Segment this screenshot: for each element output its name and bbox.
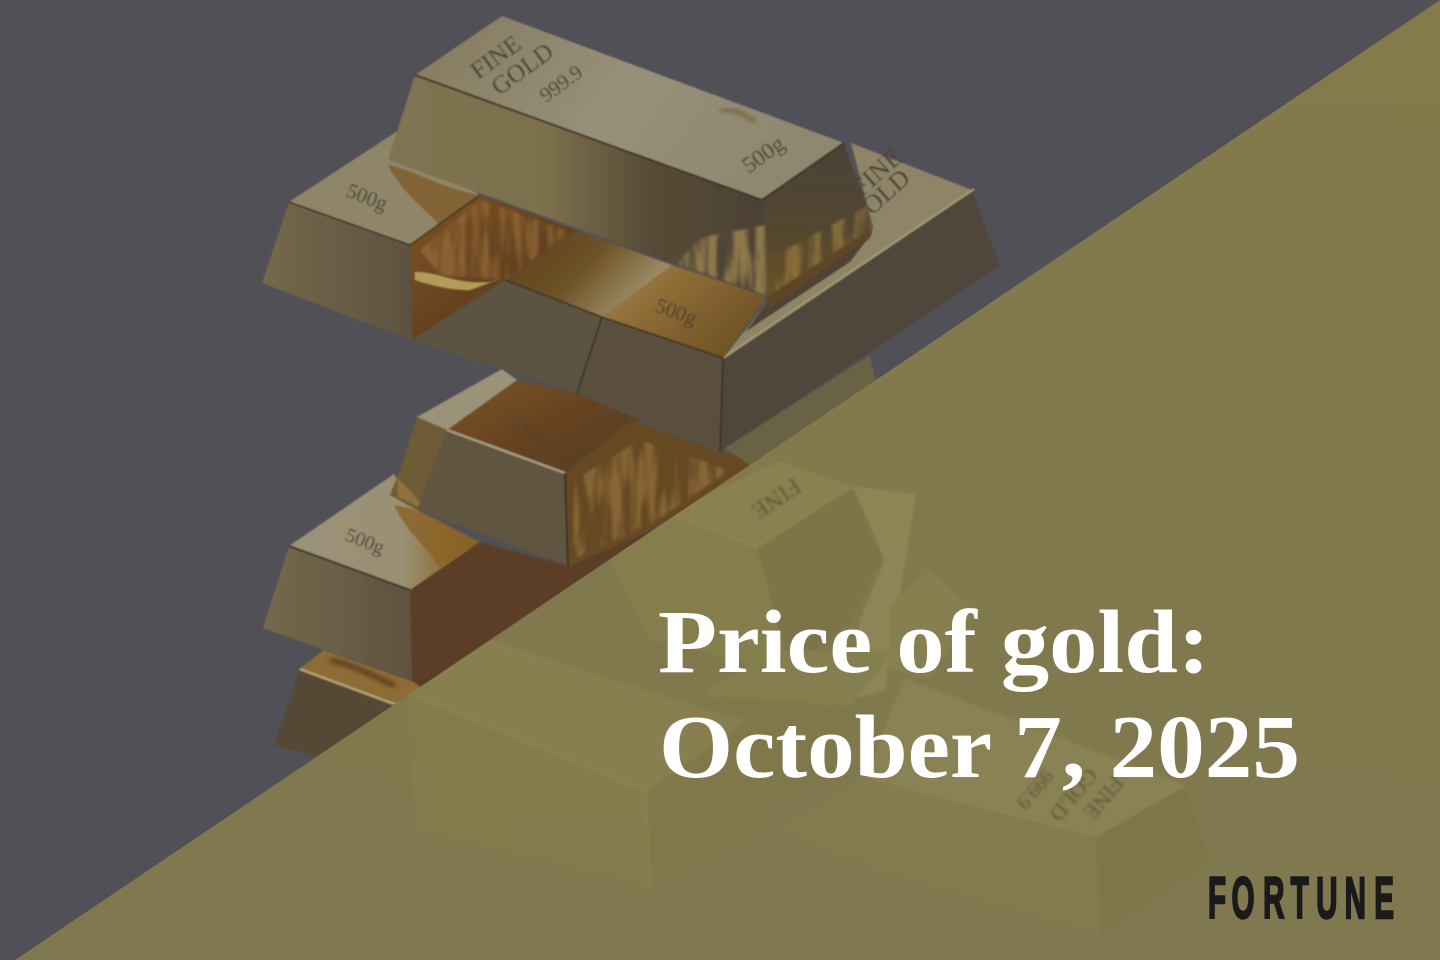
ghost bar: centre bar: [786, 652, 889, 696]
engraved text: FINE: [1078, 771, 1129, 825]
engraved weight: 500g: [342, 524, 387, 559]
feathered reflections on side: [676, 225, 767, 296]
engraved text: 999.9: [1012, 765, 1057, 813]
engraved weight: 500g: [652, 293, 700, 330]
photo: stack of gold bars: [262, 16, 1000, 780]
engraved text: FINE: [846, 142, 908, 202]
title: [658, 593, 1300, 797]
light streak on orange face: [415, 272, 502, 290]
engraved weight: 500g: [503, 409, 548, 446]
gold bar: top FINE GOLD 999.9: [388, 16, 873, 308]
engraved text: FINE: [747, 472, 805, 523]
gold bar: lower back bar: [274, 650, 440, 780]
gold bar: right base bar: [720, 142, 1000, 472]
engraved text: 500g: [737, 130, 790, 178]
feathered reflections on end: [770, 205, 873, 295]
gold bar: lower 500g bar: [263, 474, 660, 720]
title line 2: October 7, 2025: [659, 698, 1300, 797]
ghost bar: upper FINE bar: [610, 461, 916, 700]
engraved weight: 500g: [343, 178, 391, 216]
feathered reflection on bar end: [572, 440, 730, 560]
engraved text: FINE: [466, 30, 526, 85]
engraved text: 999.9: [535, 60, 587, 107]
engraved text: GOLD: [1045, 763, 1103, 826]
ghost bar: lower long bar: [410, 647, 700, 792]
ghost bar: right FINE GOLD bar: [867, 680, 1183, 836]
gold bar: base row: [262, 132, 767, 452]
ghost gold bars seen through overlay: [410, 464, 1183, 836]
logo: FORTUNE: FORTUNE: [1208, 865, 1394, 931]
feathered reflection on orange face: [420, 200, 570, 280]
engraved text: OLD: [857, 163, 916, 220]
title line 1: Price of gold:: [658, 593, 1210, 692]
gold bar: middle bar with orange top: [390, 369, 770, 566]
engraved text: GOLD: [487, 38, 559, 101]
